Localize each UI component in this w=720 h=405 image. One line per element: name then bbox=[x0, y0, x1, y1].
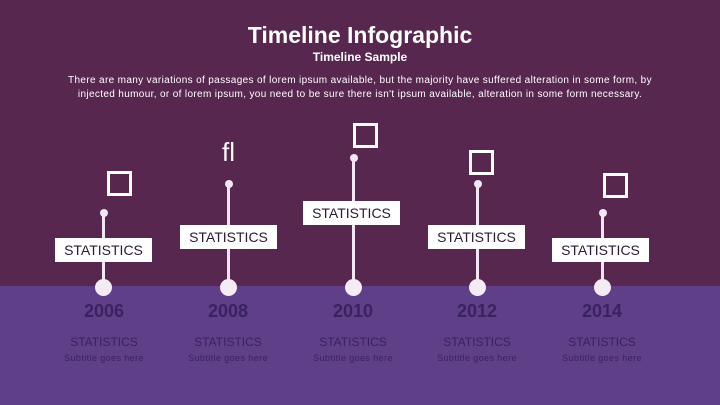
item 2012: Subtitle goes here bbox=[437, 353, 517, 363]
item 2006: STATISTICS bbox=[64, 242, 143, 258]
item 2012: STATISTICS bbox=[437, 229, 516, 245]
item 2010: STATISTICS bbox=[319, 335, 387, 349]
item 2010: Subtitle goes here bbox=[313, 353, 393, 363]
item 2008: fl bbox=[222, 137, 235, 167]
title: Timeline Infographic bbox=[248, 22, 472, 48]
item 2012: 2012 bbox=[457, 301, 497, 321]
item 2006 bbox=[55, 171, 152, 363]
item 2008: 2008 bbox=[208, 301, 248, 321]
item 2006: STATISTICS bbox=[70, 335, 138, 349]
item 2008: Subtitle goes here bbox=[188, 353, 268, 363]
item 2012 bbox=[428, 150, 525, 363]
item 2010: STATISTICS bbox=[312, 205, 391, 221]
item 2008: STATISTICS bbox=[194, 335, 262, 349]
item 2014: 2014 bbox=[582, 301, 622, 321]
item 2014: STATISTICS bbox=[561, 242, 640, 258]
item 2012: STATISTICS bbox=[443, 335, 511, 349]
item 2010: 2010 bbox=[333, 301, 373, 321]
item 2008: STATISTICS bbox=[189, 229, 268, 245]
item 2014: Subtitle goes here bbox=[562, 353, 642, 363]
item 2014: STATISTICS bbox=[568, 335, 636, 349]
item 2006: Subtitle goes here bbox=[64, 353, 144, 363]
item 2008 bbox=[180, 137, 277, 363]
item 2006: 2006 bbox=[84, 301, 124, 321]
subtitle: Timeline Sample bbox=[313, 50, 407, 64]
item 2014 bbox=[552, 173, 649, 363]
item 2010 bbox=[303, 123, 400, 363]
description: There are many variations of passages of lorem ipsum available, but the majority have suffered alteration in some form, by injected humour, or of lorem ipsum, you need to be sure there isn't ipsum available, alteration in some form necessary. bbox=[68, 75, 652, 100]
